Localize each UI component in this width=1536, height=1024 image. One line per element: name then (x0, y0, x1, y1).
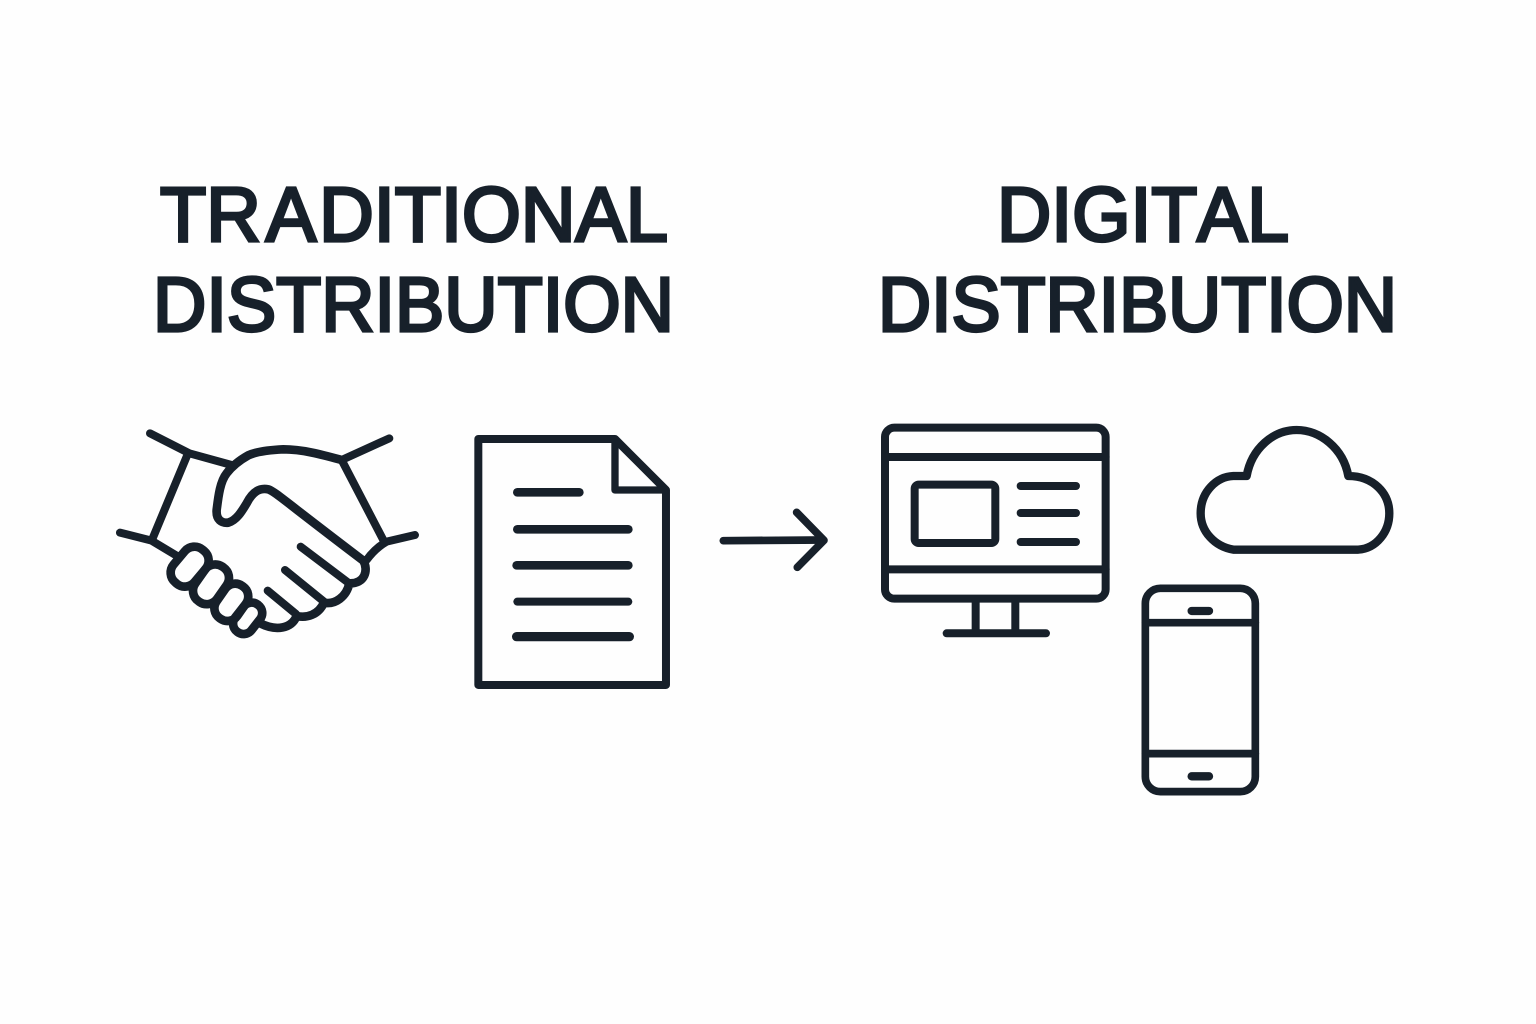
icon: document (478, 439, 666, 685)
heading: traditional distribution (153, 172, 674, 348)
heading: traditional distribution: DISTRIBUTION (153, 262, 674, 348)
icon: smartphone (1145, 588, 1255, 792)
heading: digital distribution (878, 172, 1397, 348)
arrow: traditional to digital (723, 512, 824, 567)
heading: digital distribution: DISTRIBUTION (878, 262, 1397, 348)
icon: handshake (120, 433, 415, 638)
icon: desktop monitor (885, 428, 1106, 633)
heading: traditional distribution: TRADITIONAL (160, 172, 668, 258)
icon: cloud (1201, 430, 1389, 550)
heading: digital distribution: DIGITAL (997, 172, 1289, 258)
